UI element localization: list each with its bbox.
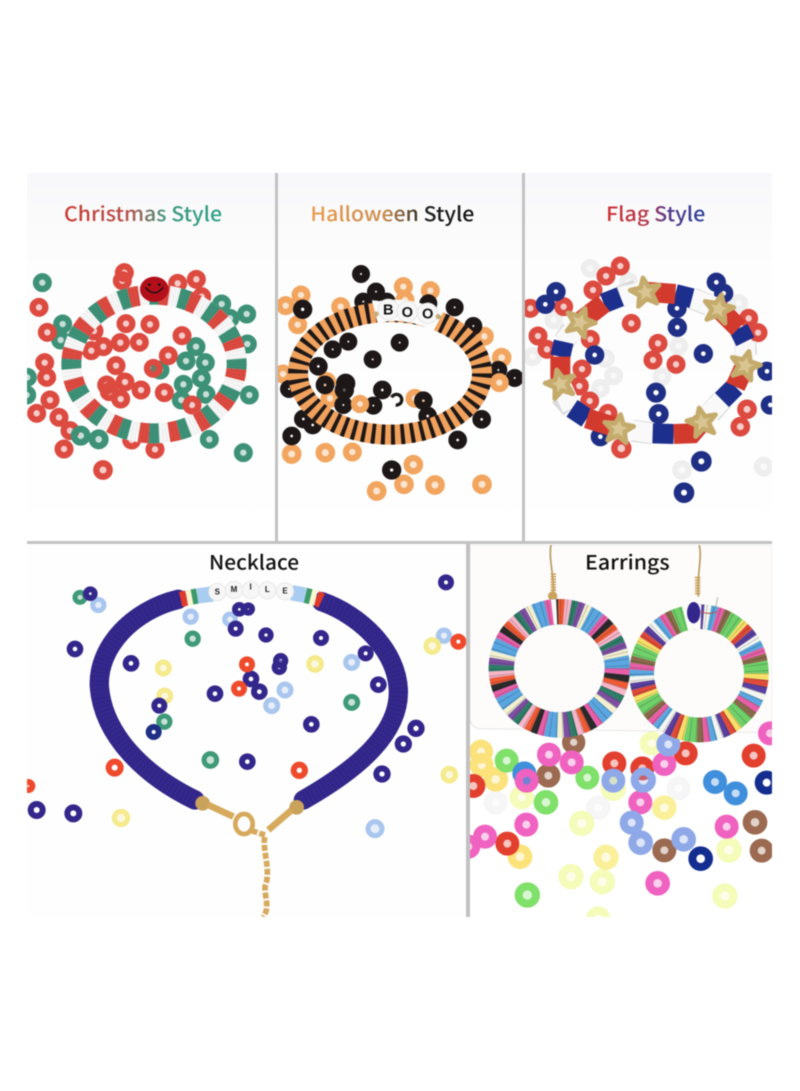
heading: Necklace: Necklace — [209, 547, 299, 576]
loose beads: mixed colours — [460, 725, 778, 926]
loose beads: mixed colours — [24, 577, 463, 836]
left earring — [501, 545, 617, 725]
loose beads: black and orange — [277, 269, 520, 498]
panel: Necklace — [26, 547, 467, 918]
earring display card — [470, 545, 772, 733]
panel: Halloween style — [277, 198, 523, 502]
heading: Christmas Style: Christmas Style — [64, 198, 222, 227]
icons: gold star beads — [543, 275, 763, 444]
gold clasp and chain — [195, 796, 304, 917]
letter beads: SMILE: E — [282, 586, 288, 595]
panel: Flag style — [524, 198, 773, 504]
letter beads: BOO — [373, 299, 441, 324]
panel: Earrings — [469, 544, 773, 918]
letter beads: BOO: O — [402, 305, 413, 321]
letter beads: BOO: B — [383, 303, 394, 319]
necklace band: dark blue beads — [99, 599, 398, 800]
icon: smiley bead — [140, 277, 169, 302]
beads over the bracelet — [74, 429, 105, 446]
bracelet: orange and black stripes — [298, 310, 482, 435]
panel dividers — [27, 173, 772, 917]
heading: Halloween Style: Halloween Style — [310, 198, 474, 227]
letter beads: SMILE: L — [265, 585, 270, 594]
loose beads: red, white and blue — [524, 260, 776, 499]
bracelet: red, white and blue sections — [560, 290, 746, 434]
heading: Earrings: Earrings — [585, 547, 670, 576]
necklace rainbow spacers — [181, 593, 322, 601]
panel: Christmas style — [26, 198, 260, 481]
letter beads: SMILE: S — [215, 588, 221, 597]
letter beads: SMILE: I — [250, 582, 252, 591]
heading: Flag Style: Flag Style — [606, 198, 705, 227]
bracelet: red, green and white — [71, 295, 237, 433]
letter beads: SMILE: M — [231, 585, 238, 594]
loose beads: green and red — [20, 266, 256, 477]
right earring — [642, 545, 756, 730]
letter beads: SMILE — [209, 581, 294, 601]
letter beads: BOO: O — [422, 307, 433, 323]
